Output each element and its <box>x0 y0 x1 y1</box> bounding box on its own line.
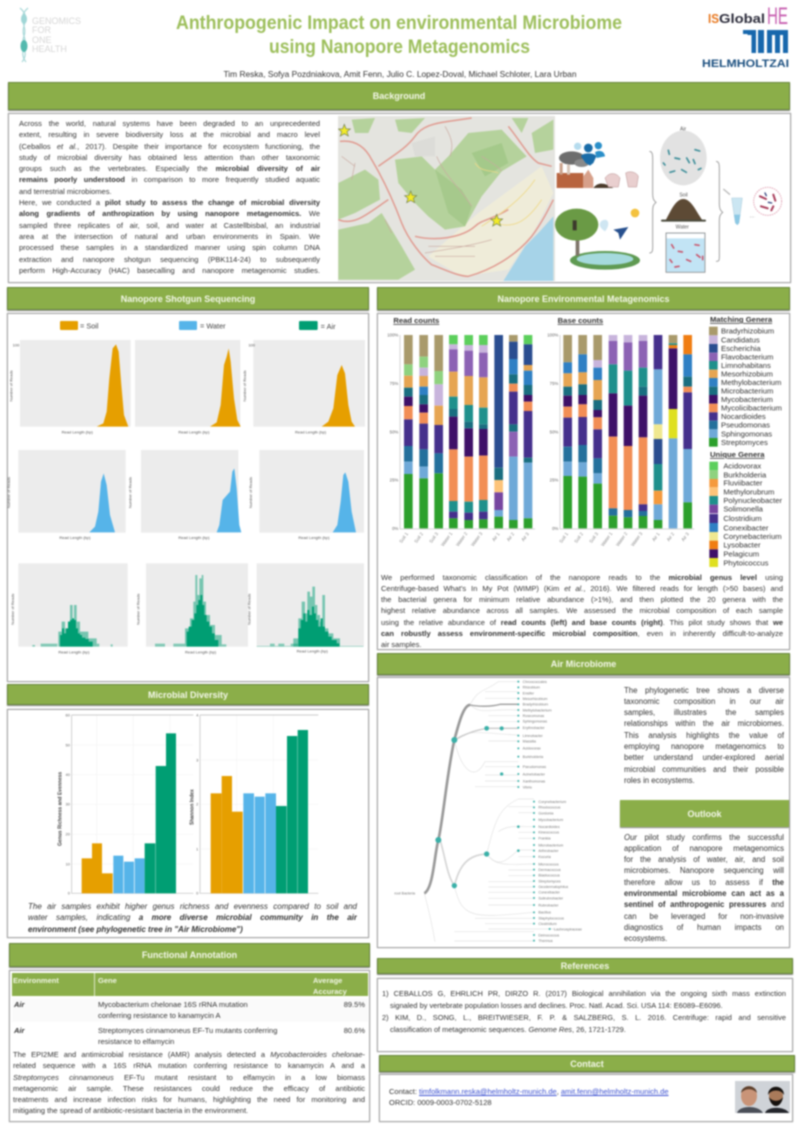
text block: AMR analysis <box>12 1050 366 1116</box>
heading: Outlook: Outlook <box>688 808 722 818</box>
upper leaf labels <box>517 680 552 789</box>
table header <box>12 973 368 996</box>
lower leaf labels: Solirubrobacter <box>538 896 564 900</box>
logos: ISGlobal, HE, TUM, Helmholtz AI: HELMHOLTZAI <box>702 58 789 70</box>
title: using Nanopore Metagenomics <box>269 37 530 58</box>
text block: background <box>18 119 321 276</box>
upper leaf labels: Bradyrhizobium <box>523 703 548 707</box>
text block: background: extraction and nanopore shotgun sequencing (PBK114-24) to subsequently <box>19 255 320 264</box>
logo: Genomics for One Health: ONE <box>32 35 52 45</box>
legend: unique genera <box>710 450 783 567</box>
upper leaf labels: Pseudomonas <box>523 765 546 769</box>
axes: 0% <box>392 526 398 531</box>
lower leaf labels: Lachnospiraceae <box>554 927 582 931</box>
lower leaf labels: Clostridium <box>538 922 557 926</box>
chart: Shannon index: 3 <box>196 757 199 762</box>
chart: Shannon index: 4 <box>196 712 199 717</box>
text block: outlook: Our pilot study confirms the successful <box>624 832 784 842</box>
chart: Shannon index: 0 <box>196 891 199 896</box>
lower leaf labels: Dermacoccus <box>538 868 561 872</box>
text block: outlook: therefore allow us to assess if the <box>624 878 784 887</box>
legend: unique genera: Methylorubrum <box>723 487 774 496</box>
icon: water sample <box>666 225 705 272</box>
lower leaf labels: Microbacterium <box>538 843 563 847</box>
logos: ISGlobal, HE, TUM, Helmholtz AI: Global <box>719 11 765 26</box>
panel: contact <box>379 1074 793 1122</box>
legend: matching genera: Candidatus <box>721 335 760 344</box>
legend: unique genera: Conexibacter <box>723 523 769 532</box>
text block: references: signaled by vertebrate population losses and declines. Proc. Natl. Acad. Sci. USA 114: E6089–E6096. <box>390 1000 723 1010</box>
chart title: read counts: Read counts <box>393 316 439 325</box>
heading: Microbial Diversity <box>7 684 369 705</box>
axes: 75% <box>550 381 558 386</box>
upper leaf labels: Roseomonas <box>523 714 544 718</box>
heading: Contact <box>379 1055 795 1072</box>
axes: Air 2 <box>506 531 516 542</box>
legend: matching genera: Microbacterium <box>721 386 773 395</box>
axes: 0% <box>552 526 558 531</box>
water histograms: Read Length (bp) <box>298 535 330 540</box>
row 1: Mycobacterium chelonae 16S rRNA mutation <box>98 1000 248 1009</box>
chart: Shannon index: 1 <box>196 846 199 851</box>
text block: background: groups such as the vertebrates. Especially the microbial diversity of air <box>19 164 320 173</box>
legend: unique genera: Acidovorax <box>723 462 761 471</box>
lower leaf labels: Nocardioides <box>538 825 560 829</box>
text block: outlook: for the analysis of water, air, and soil <box>624 855 784 864</box>
legend: matching genera: Pseudomonas <box>721 421 770 430</box>
icon: petri dish <box>750 187 782 217</box>
row 2: Air <box>14 1026 24 1035</box>
icon: air sample: Air <box>680 126 686 132</box>
axes: Air 2 <box>666 531 676 542</box>
axes: Water 1 <box>600 531 614 547</box>
legend: soil, water, air: = Water <box>200 321 226 330</box>
water histograms: Read Length (bp) <box>59 535 91 540</box>
legend: matching genera: Mesorhizobium <box>721 369 773 378</box>
table header: Accuracy <box>313 987 347 996</box>
lower leaf labels: Deinococcus <box>538 933 559 937</box>
upper leaf labels: Acinetobacter <box>523 772 546 776</box>
logos: ISGlobal, HE, TUM, Helmholtz AI <box>702 3 790 70</box>
lower leaf labels: Gordonia <box>538 811 554 815</box>
air histograms: Read Length (bp) <box>185 650 217 655</box>
upper leaf labels: Massilia <box>523 740 537 744</box>
text block: air microbiome description <box>623 686 785 786</box>
text block: air microbiome description: better understand under-explored aerial <box>624 753 784 762</box>
caption: microbial diversity: water samples, indicating a more diverse microbial community in the air <box>28 913 357 922</box>
text block: background: sampled three replicates of air, soil, and water at Castellbisbal, an industrial <box>19 221 320 230</box>
caption: microbial diversity <box>27 902 358 934</box>
axes: 75% <box>390 381 398 386</box>
air histograms: Number of Reads <box>10 594 15 625</box>
lower leaf labels: Geodermatophilus <box>538 885 568 889</box>
chart: genus richness and evenness: 10 <box>66 861 71 866</box>
row 1 <box>12 998 368 1022</box>
water histograms: Read Length (bp) <box>178 535 210 540</box>
axes: 50% <box>550 429 558 434</box>
text block: metagenomics description: the bacterial genera for minimum relative abundance (>1%), and then plotted the 20 genera with the <box>381 595 783 604</box>
legend: soil, water, air: = Air <box>321 322 336 331</box>
table header: Environment <box>13 976 59 985</box>
text block: air microbiome description: relationships within the air microbiomes. <box>624 719 784 728</box>
chart: genus richness and evenness <box>57 712 193 896</box>
air histograms: Read Length (bp) <box>58 650 90 655</box>
text block: outlook: sentinel of anthropogenic pressures and <box>624 900 784 909</box>
text block: background: extent, resulting in severe biodiversity loss at the microbial and macro level <box>19 130 320 139</box>
icon: tree, bird, pond and sun <box>555 209 640 270</box>
text block: air microbiome description: This analysis highlights the value of <box>624 731 784 740</box>
upper leaf labels: Mesorhizobium <box>523 697 547 701</box>
axes: Water 2 <box>615 531 629 547</box>
upper leaf labels: Erythrobacter <box>523 726 545 730</box>
text block: background: (Ceballos et al., 2017). Despite their importance for ecosystem functioning, the <box>19 142 320 151</box>
text block: contact details: ORCID: 0009-0003-0702-5128 <box>389 1098 492 1107</box>
axes: Air 1 <box>651 531 661 542</box>
text block: outlook: diagnostics of human impacts on <box>624 923 784 932</box>
axes: Soil 3 <box>428 531 439 544</box>
soil histograms: 100 <box>248 343 256 348</box>
lower leaf labels: Blastococcus <box>538 874 560 878</box>
upper leaf labels: Methylobacterium <box>523 708 552 712</box>
text block: metagenomics description: air samples. <box>381 640 421 649</box>
heading: Functional Annotation: Functional Annotation <box>142 950 237 960</box>
row 2 <box>12 1024 368 1049</box>
axes: Soil 3 <box>588 531 599 544</box>
lower leaf labels: Rhodococcus <box>538 806 561 810</box>
text block: outlook: microbiomes. Nanopore sequencing will <box>624 866 784 875</box>
stacked bar charts and genus legend <box>387 315 783 568</box>
text block: references: classification of metagenomic sequences. Genome Res, 26, 1721-1729. <box>390 1024 626 1034</box>
lower leaf labels: Arthrobacter <box>538 849 559 853</box>
icon: pollution cloud and factory <box>557 151 613 188</box>
legend: unique genera: Burkholderia <box>723 470 767 479</box>
upper leaf labels: Chroococcales <box>523 680 547 684</box>
heading: Nanopore Environmental Metagenomics <box>377 287 790 310</box>
chart: genus richness and evenness: 20 <box>66 832 71 837</box>
lower leaf labels: Thermus <box>538 939 553 943</box>
heading: Nanopore Shotgun Sequencing <box>7 287 369 310</box>
title: Anthropogenic Impact on environmental Microbiome <box>176 13 622 34</box>
text block: background: processed these samples in a standardized manner using spin column DNA <box>19 243 320 252</box>
map with sampling sites <box>338 116 555 281</box>
axes: Soil 1 <box>558 531 569 544</box>
chart: Shannon index: 2 <box>196 802 199 807</box>
lower leaf labels: root Bacteria <box>394 892 416 896</box>
legend: matching genera: Escherichia <box>721 344 761 353</box>
lower leaf labels: Streptomyces <box>538 879 561 883</box>
braces <box>649 151 723 261</box>
icon: air sample <box>660 126 707 185</box>
legend: unique genera: Corynebacterium <box>723 532 782 541</box>
legend: unique genera: Unique Genera <box>710 450 765 459</box>
legend: matching genera <box>710 315 782 447</box>
panel: functional annotation <box>9 970 370 1122</box>
text block: air microbiome description: taxonomic composition in our air <box>624 697 784 706</box>
text block: outlook: can be leveraged for non-invasive <box>624 912 784 921</box>
axes: Water 3 <box>470 531 484 547</box>
legend: unique genera: Pelagicum <box>723 549 759 558</box>
legend: soil, water, air: = Soil <box>80 321 99 330</box>
icon: soil sample: Soil <box>679 192 688 198</box>
legend: unique genera: Fluviibacter <box>723 479 763 488</box>
panel: nanopore shotgun sequencing <box>7 313 369 682</box>
lower leaf labels: Frankia <box>538 837 551 841</box>
axes: Soil 2 <box>413 531 424 544</box>
read length histograms <box>6 320 365 656</box>
lower leaf labels: Rubrobacter <box>538 903 559 907</box>
upper leaf labels: Limnobacter <box>523 734 544 738</box>
icon: sample tube <box>723 189 742 225</box>
text block: references: 2) KIM, D., SONG, L., BREITWIESER, F. P. & SALZBERG, S. L. 2016. Centrifuge: rapid and sensitive <box>382 1012 786 1022</box>
text block: outlook: environmental microbiome can act as a <box>624 889 784 898</box>
legend: matching genera: Mycolicibacterium <box>721 404 782 413</box>
heading: Nanopore Shotgun Sequencing: Nanopore Shotgun Sequencing <box>121 294 255 304</box>
heading: Contact: Contact <box>570 1058 604 1068</box>
heading: Nanopore Environmental Metagenomics: Nanopore Environmental Metagenomics <box>497 294 670 304</box>
text block: AMR analysis: metagenomic air sample. These resistances could reduce the efficacy of antibiotic <box>13 1084 365 1093</box>
panel: background <box>8 113 791 283</box>
authors: Tim Reska, Sofya Pozdniakova, Amit Fenn, Julio C. Lopez-Doval, Michael Schloter, Lara Urban <box>224 69 576 79</box>
logo: Genomics for One Health <box>19 7 81 63</box>
text block: air microbiome description: microbial communities and their possible <box>624 765 784 774</box>
soil histograms: Read Length (bp) <box>295 429 327 434</box>
lower leaf labels: Corynebacterium <box>538 800 566 804</box>
table header: Average <box>313 976 342 985</box>
illustration: anthropogenic and natural sources to air, soil, water sampling <box>554 126 783 274</box>
soil histograms <box>9 340 365 434</box>
row 1: conferring resistance to kanamycin A <box>98 1011 221 1020</box>
chart: genus richness and evenness: 0 <box>68 891 71 896</box>
text block: outlook: ecosystems. <box>624 934 667 943</box>
water histograms: Number of Reads <box>248 477 253 508</box>
title <box>176 13 622 58</box>
chart: genus richness and evenness: 50 <box>66 742 71 747</box>
text block: background: along gradients of anthropization by using nanopore metagenomics. We <box>19 209 320 218</box>
lower leaf labels: Bacillus <box>538 911 551 915</box>
legend: unique genera: Clostridium <box>723 514 762 523</box>
legend: unique genera: Solimonella <box>723 505 764 514</box>
water histograms: Number of Reads <box>128 477 133 508</box>
text block: background: area at the intersection of natural and urban environments in Spain. We <box>19 232 320 241</box>
table: antimicrobial resistance genes <box>11 972 369 1046</box>
caption: microbial diversity: environment (see phylogenetic tree in "Air Microbiome") <box>28 925 243 934</box>
text block: background: Here, we conducted a pilot study to assess the change of microbial diversity <box>19 198 320 207</box>
text block: contact details <box>388 1087 670 1107</box>
text block: AMR analysis: treatments and increase infection risks for humans, highlighting the need for monitoring and <box>13 1095 365 1104</box>
lower leaf labels <box>394 800 582 943</box>
heading: References: References <box>561 961 609 971</box>
axes: Soil 2 <box>573 531 584 544</box>
heading: References <box>377 958 793 974</box>
legend: matching genera: Methylobacterium <box>721 378 781 387</box>
portrait photos <box>735 1081 790 1113</box>
lower leaf labels: Kocuria <box>538 855 552 859</box>
text block: metagenomics description: We performed taxonomic classification of the nanopore reads to the microbial genus level using <box>381 572 783 582</box>
upper leaf labels: Rhizobium <box>523 686 540 690</box>
axes <box>387 333 694 547</box>
text block: background: perform High-Accuracy (HAC) basecalling and nanopore metagenomic studies. <box>19 266 320 275</box>
text block: metagenomics description: using the relative abundance of read counts (left) and base counts (right). This pilot study shows that we <box>381 618 783 627</box>
soil histograms: Number of Reads <box>242 370 247 402</box>
upper leaf labels: Sphingomonas <box>523 720 547 724</box>
axes: 100% <box>547 333 558 338</box>
icon: farm animals <box>605 172 638 187</box>
panel: references <box>377 978 793 1052</box>
text block: AMR analysis: mitigating the spread of antibiotic-resistant bacteria in the environment. <box>13 1106 248 1115</box>
lower leaf labels: Conexibacter <box>538 891 561 895</box>
heading: Functional Annotation <box>9 943 370 967</box>
heading: Air Microbiome <box>377 653 790 675</box>
bars: read counts <box>408 335 528 528</box>
soil histograms: Number of Reads <box>9 370 14 402</box>
chart: genus richness and evenness: 60 <box>66 712 71 717</box>
heading: Background <box>8 82 790 110</box>
axes: Air 3 <box>680 531 690 542</box>
upper leaf labels: Xanthomonas <box>523 779 545 783</box>
legend: matching genera: Matching Genera <box>710 315 773 324</box>
text block: AMR analysis: Streptomyces cinnamoneus EF-Tu mutant resistant to elfamycin in a low biomass <box>13 1073 365 1082</box>
air histograms: Number of Reads <box>247 594 252 625</box>
panel: nanopore environmental metagenomics <box>377 313 790 650</box>
upper leaf labels: Ensifer <box>523 691 535 695</box>
text block: air microbiome description: samples, illustrates the samples <box>624 708 784 717</box>
text block: AMR analysis: related sequence with a 16S rRNA mutation conferring resistance to kanamycin A and a <box>13 1061 365 1070</box>
text block: references: 1) CEBALLOS G, EHRLICH PR, DIRZO R. (2017) Biological annihilation via the ongoing sixth mass extinction <box>382 988 786 998</box>
text block: metagenomics description: can robustly assess environment-specific microbial composition, even in inherently difficult-to-analyze <box>381 629 783 638</box>
legend: unique genera: Lysobacter <box>723 541 761 550</box>
text block: air microbiome description: The phylogenetic tree shows a diverse <box>624 686 784 694</box>
logo: Genomics for One Health: FOR <box>32 25 51 35</box>
text block: contact details: Contact: timfolkmann.reska@helmholtz-munich.de, amit.fenn@helmholtz-munich.de <box>389 1087 669 1096</box>
axes: Air 1 <box>491 531 501 542</box>
chart: genus richness and evenness: Genus Richness and Evenness <box>57 772 63 846</box>
text block: AMR analysis: The EPI2ME and antimicrobial resistance (AMR) analysis detected a Mycobacteroides chelonae- <box>13 1050 365 1059</box>
text block: background: remains poorly understood in comparison to more frequently studied aquatic <box>19 175 320 184</box>
text block: air microbiome description: employing nanopore metagenomics to <box>624 742 784 751</box>
text block: outlook <box>623 832 785 944</box>
legend: matching genera: Streptomyces <box>721 438 768 447</box>
air histograms: Read Length (bp) <box>297 649 328 654</box>
panel: air microbiome <box>377 677 790 948</box>
tree nodes <box>435 726 520 888</box>
legend: matching genera: Limnohabitans <box>721 361 771 370</box>
chart: Shannon index: Shannon Index <box>190 789 196 825</box>
water histograms: Number of Reads <box>6 477 11 508</box>
lower leaf labels: Micrococcus <box>538 862 559 866</box>
row 1: Air <box>14 1000 24 1009</box>
legend: matching genera: Sphingomonas <box>721 429 772 438</box>
logos: ISGlobal, HE, TUM, Helmholtz AI: HE <box>767 3 788 30</box>
chart title: base counts: Base counts <box>558 316 603 325</box>
axes: 25% <box>550 478 558 483</box>
axes: Water 3 <box>630 531 644 547</box>
text block: references <box>382 988 786 1034</box>
bar charts: richness and Shannon index <box>56 712 318 896</box>
text block: metagenomics description: Centrifuge-based What's In My Pot (WIMP) (Kim et al., 2016). We filtered reads for length (>50 bases) and <box>381 584 783 593</box>
legend: unique genera: Phytoicoccus <box>723 558 769 567</box>
row 2: resistance to elfamycin <box>98 1037 174 1046</box>
logo: Genomics for One Health: HEALTH <box>32 44 67 54</box>
air histograms: Number of Reads <box>135 594 140 625</box>
text block: background: study of microbial diversity has obtained less attention than other taxonomic <box>19 153 320 162</box>
legend: soil, water, air <box>60 321 336 331</box>
soil histograms: 100 <box>13 343 20 348</box>
heading: Air Microbiome: Air Microbiome <box>551 659 616 669</box>
logos: ISGlobal, HE, TUM, Helmholtz AI: IS <box>708 11 719 26</box>
axes: Air 3 <box>520 531 530 542</box>
legend: matching genera: Mycobacterium <box>721 395 773 404</box>
air histograms <box>10 563 364 655</box>
row 2: Streptomyces cinnamoneus EF-Tu mutants conferring <box>98 1026 277 1035</box>
table header: Gene <box>98 976 117 985</box>
axes: 25% <box>390 478 398 483</box>
legend: matching genera: Bradyrhizobium <box>721 327 774 336</box>
upper leaf labels: Burkholderia <box>523 755 544 759</box>
axes: Water 1 <box>440 531 454 547</box>
soil histograms: Read Length (bp) <box>62 429 93 434</box>
heading: Microbial Diversity: Microbial Diversity <box>148 690 228 700</box>
legend: unique genera: Polynucleobacter <box>723 496 783 505</box>
bars: base counts <box>568 335 688 528</box>
chart: genus richness and evenness: 40 <box>66 772 71 777</box>
lower leaf labels: Mycobacterium <box>538 818 563 822</box>
icon: people <box>574 142 605 166</box>
row 1: 89.5% <box>344 1000 365 1009</box>
soil histograms: Read Length (bp) <box>178 429 210 434</box>
axes: Water 2 <box>455 531 469 547</box>
panel: microbial diversity <box>7 709 369 938</box>
chart: genus richness and evenness: 30 <box>66 802 71 807</box>
icon: soil sample <box>661 192 706 222</box>
legend: matching genera: Flavobacterium <box>721 352 773 361</box>
text block: background: and terrestrial microbiomes. <box>19 187 112 196</box>
caption: microbial diversity: The air samples exhibit higher genus richness and evenness compared to soil and <box>28 902 357 910</box>
axes: 100% <box>387 333 398 338</box>
legend: matching genera: Nocardioides <box>721 412 766 421</box>
text block: metagenomics description <box>380 572 784 650</box>
axes: Soil 1 <box>398 531 409 544</box>
text block: outlook: application of nanopore metagenomics <box>624 844 784 853</box>
logo: Genomics for One Health: GENOMICS <box>32 16 81 26</box>
text block: background: Across the world, natural systems have been degraded to an unprecedented <box>19 119 320 128</box>
icon: water sample: Water <box>676 225 689 231</box>
lower leaf labels: Staphylococcus <box>538 916 564 920</box>
upper leaf labels: Vibrio <box>523 785 532 789</box>
heading: Outlook <box>620 800 789 827</box>
axes: 50% <box>390 429 398 434</box>
row 2: 80.6% <box>344 1026 365 1035</box>
chart: Shannon index <box>190 712 318 896</box>
heading: Background: Background <box>373 91 425 101</box>
text block: metagenomics description: highest relative abundance across all samples. We assessed the microbial composition of each sample <box>381 606 783 615</box>
water histograms <box>6 450 364 540</box>
lower leaf labels: Kineococcus <box>538 831 559 835</box>
phylogenetic tree <box>394 680 582 943</box>
text block: air microbiome description: roles in ecosystems. <box>624 776 695 785</box>
upper leaf labels: Acidovorax <box>523 747 541 751</box>
